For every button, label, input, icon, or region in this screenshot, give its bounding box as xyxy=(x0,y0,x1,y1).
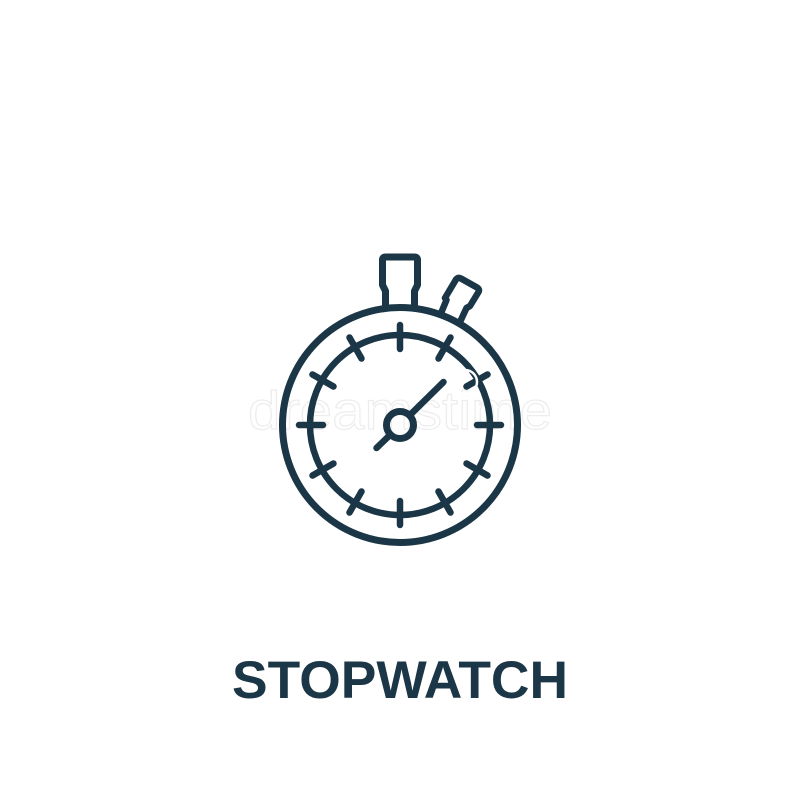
inner ring xyxy=(310,335,490,515)
dial hub xyxy=(386,412,414,438)
tick marks xyxy=(299,325,501,525)
icon: stopwatch xyxy=(282,257,518,542)
top button xyxy=(382,257,418,306)
side button xyxy=(442,278,479,322)
hand xyxy=(376,382,444,448)
watermark: dreamstime xyxy=(248,381,552,441)
title: STOPWATCH xyxy=(232,651,568,710)
watermark ring gap xyxy=(453,370,477,394)
outer ring xyxy=(282,308,518,542)
